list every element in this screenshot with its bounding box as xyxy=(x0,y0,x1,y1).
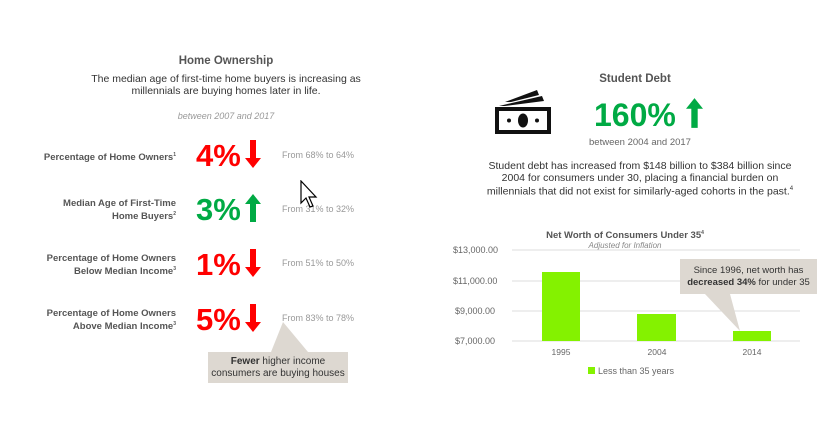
heading: student debt: Student Debt xyxy=(599,73,671,85)
icon: cursor xyxy=(300,180,318,208)
chart: net worth: $9,000.00 xyxy=(455,306,495,316)
text: period: between 2004 and 2017 xyxy=(589,137,691,148)
row 2 label: Median Age of First-Time xyxy=(63,198,176,209)
row 3 value xyxy=(196,247,261,282)
row 2 label xyxy=(63,198,176,222)
chart title: Net Worth of Consumers Under 354 xyxy=(546,230,704,241)
chart: net worth: 2014 xyxy=(743,347,762,357)
text block: description: 2004 for consumers under 30, placing a financial burden on xyxy=(502,172,778,184)
chart: net worth: $11,000.00 xyxy=(453,276,497,286)
row 2 value: 3% xyxy=(196,192,241,227)
row 4 label: Above Median Income3 xyxy=(73,321,176,332)
value: 160%: 160% xyxy=(594,97,676,133)
text block: period: between 2007 and 2017 xyxy=(178,111,274,121)
chart: net worth: $13,000.00 xyxy=(453,245,498,255)
row 3 label: Percentage of Home Owners xyxy=(47,253,176,264)
callout: net worth decrease xyxy=(680,259,817,331)
chart: net worth xyxy=(453,230,800,376)
row 2 value xyxy=(196,192,261,227)
panel: home ownership xyxy=(91,55,361,121)
chart title xyxy=(546,230,704,250)
text block: description xyxy=(487,160,793,198)
text block: description: millennials that did not exist for similarly-aged cohorts in the past.4 xyxy=(487,186,793,198)
chart: net worth: Less than 35 years xyxy=(598,366,675,376)
row 3 label: Below Median Income3 xyxy=(74,266,176,277)
callout: fewer buyers xyxy=(208,322,348,383)
text block: description: Student debt has increased from $148 billion to $384 billion since xyxy=(489,160,791,172)
callout: fewer buyers: consumers are buying houses xyxy=(211,368,345,379)
icon: money xyxy=(495,90,551,134)
row 1 label: Percentage of Home Owners1 xyxy=(44,152,176,163)
row 4 label xyxy=(47,308,176,332)
text block: intro xyxy=(91,73,361,97)
row 2 label: Home Buyers2 xyxy=(112,211,176,222)
row 3 from: From 51% to 50% xyxy=(282,258,354,268)
row 1 value: 4% xyxy=(196,138,241,173)
row 1 from: From 68% to 64% xyxy=(282,150,354,160)
row 4 label: Percentage of Home Owners xyxy=(47,308,176,319)
row 4 value xyxy=(196,302,261,337)
row 1 value xyxy=(196,138,261,173)
panel: student debt xyxy=(487,73,793,198)
row 4 from: From 83% to 78% xyxy=(282,313,354,323)
heading: home ownership: Home Ownership xyxy=(179,55,273,67)
chart: net worth: 2004 xyxy=(648,347,667,357)
row 3 value: 1% xyxy=(196,247,241,282)
text block: intro: The median age of first-time home buyers is increasing as xyxy=(91,73,361,85)
row 3 label xyxy=(47,253,176,277)
callout: fewer buyers: Fewer higher income xyxy=(231,356,325,367)
chart: net worth: $7,000.00 xyxy=(455,336,495,346)
chart title: Adjusted for Inflation xyxy=(589,241,661,250)
callout: net worth decrease: Since 1996, net worth has xyxy=(694,265,803,276)
callout: net worth decrease: decreased 34% for under 35 xyxy=(687,277,810,288)
row 4 value: 5% xyxy=(196,302,241,337)
chart: net worth: 1995 xyxy=(552,347,571,357)
row 2 from: From 31% to 32% xyxy=(282,204,354,214)
text block: intro: millennials are buying homes later in life. xyxy=(131,85,321,97)
